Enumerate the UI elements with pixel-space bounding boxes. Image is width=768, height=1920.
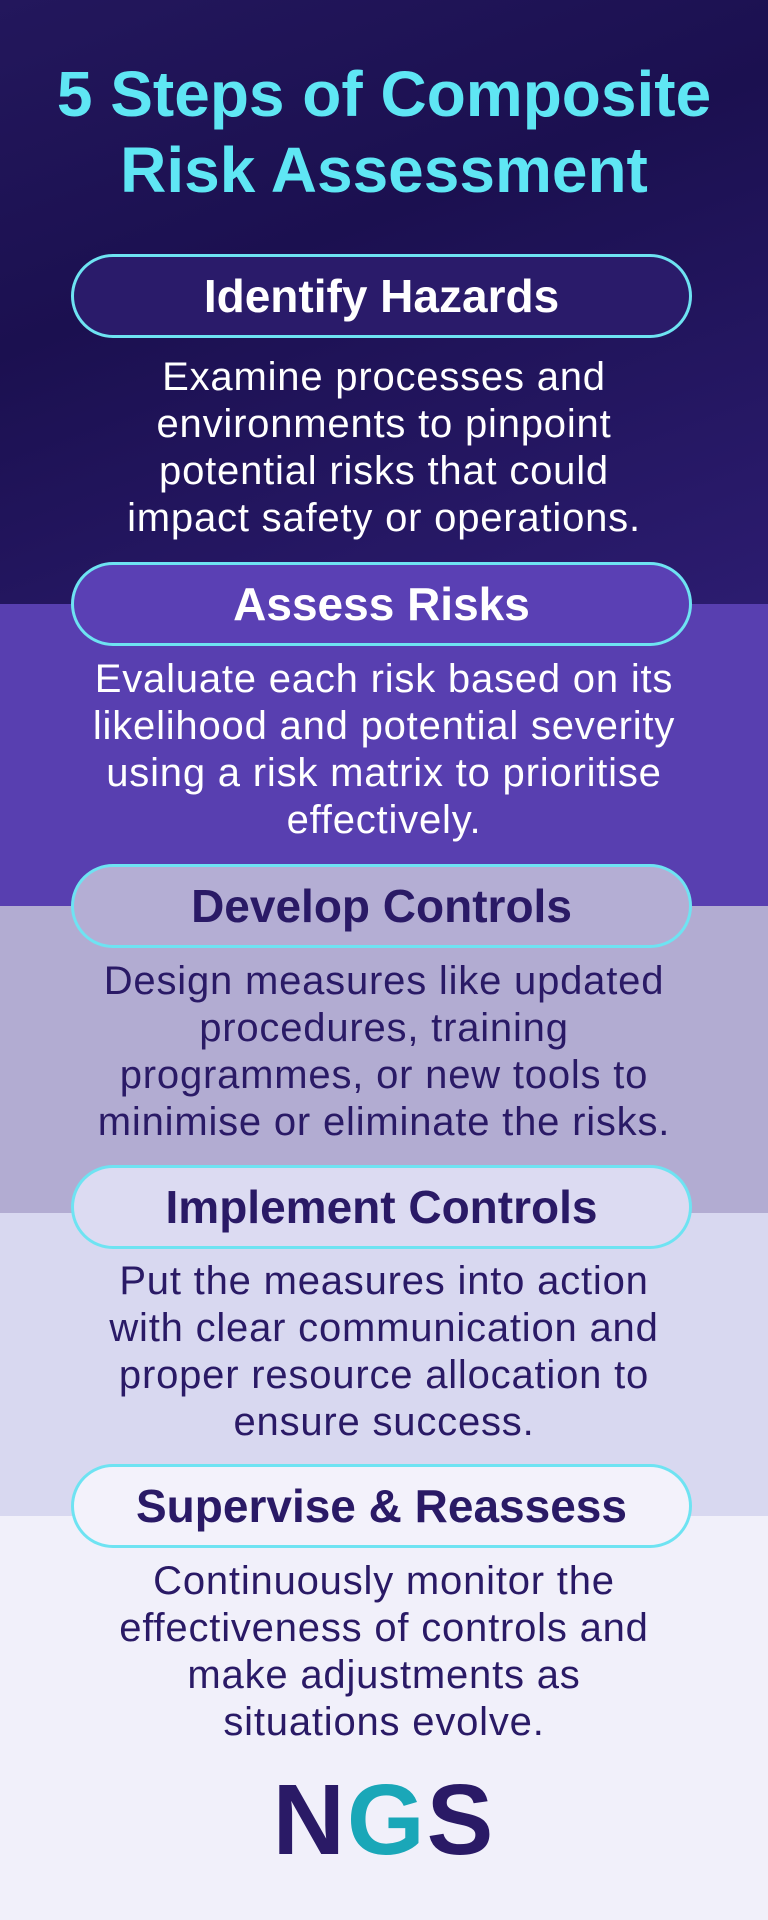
step 3 heading: Develop Controls	[191, 880, 572, 932]
step 4 text: proper resource allocation to	[119, 1353, 649, 1397]
logo NGS: NGS	[273, 1764, 495, 1876]
background band 4	[0, 1213, 768, 1516]
step 1 heading: Identify Hazards	[204, 270, 559, 322]
step 1 text: Examine processes and	[162, 355, 606, 399]
step 1 text: impact safety or operations.	[127, 496, 641, 540]
step 4 text: with clear communication and	[109, 1306, 659, 1350]
background band 2	[0, 604, 768, 906]
step 2 text: effectively.	[287, 798, 481, 842]
title: Risk Assessment	[120, 134, 648, 206]
step 3 heading	[71, 864, 692, 948]
step 2 heading	[71, 562, 692, 646]
step 5 text: effectiveness of controls and	[119, 1606, 649, 1650]
background band 5	[0, 1516, 768, 1920]
step 4 text: Put the measures into action	[119, 1259, 649, 1303]
step 1 text	[127, 355, 641, 540]
step 5 text: make adjustments as	[187, 1653, 581, 1697]
step 5 heading	[71, 1464, 692, 1548]
step 2 text: using a risk matrix to prioritise	[106, 751, 662, 795]
step 5 text: Continuously monitor the	[153, 1559, 615, 1603]
step 5 text: situations evolve.	[223, 1700, 545, 1744]
step 3 text: procedures, training	[199, 1006, 569, 1050]
step 3 text: minimise or eliminate the risks.	[98, 1100, 670, 1144]
step 3 text: programmes, or new tools to	[120, 1053, 648, 1097]
background band 1	[0, 0, 768, 604]
background band 3	[0, 906, 768, 1213]
title: 5 Steps of Composite	[57, 58, 711, 130]
step 2 text: likelihood and potential severity	[93, 704, 675, 748]
step 2 text	[93, 657, 675, 842]
step 1 text: environments to pinpoint	[156, 402, 612, 446]
title	[57, 58, 711, 206]
step 1 heading	[71, 254, 692, 338]
step 1 text: potential risks that could	[159, 449, 609, 493]
step 4 heading: Implement Controls	[166, 1181, 597, 1233]
step 5 heading: Supervise & Reassess	[136, 1480, 627, 1532]
step 4 text	[109, 1259, 659, 1444]
step 3 text	[98, 959, 670, 1144]
step 2 text: Evaluate each risk based on its	[95, 657, 673, 701]
step 2 heading: Assess Risks	[233, 578, 530, 630]
step 4 heading	[71, 1165, 692, 1249]
step 4 text: ensure success.	[233, 1400, 535, 1444]
step 3 text: Design measures like updated	[104, 959, 664, 1003]
step 5 text	[119, 1559, 649, 1744]
